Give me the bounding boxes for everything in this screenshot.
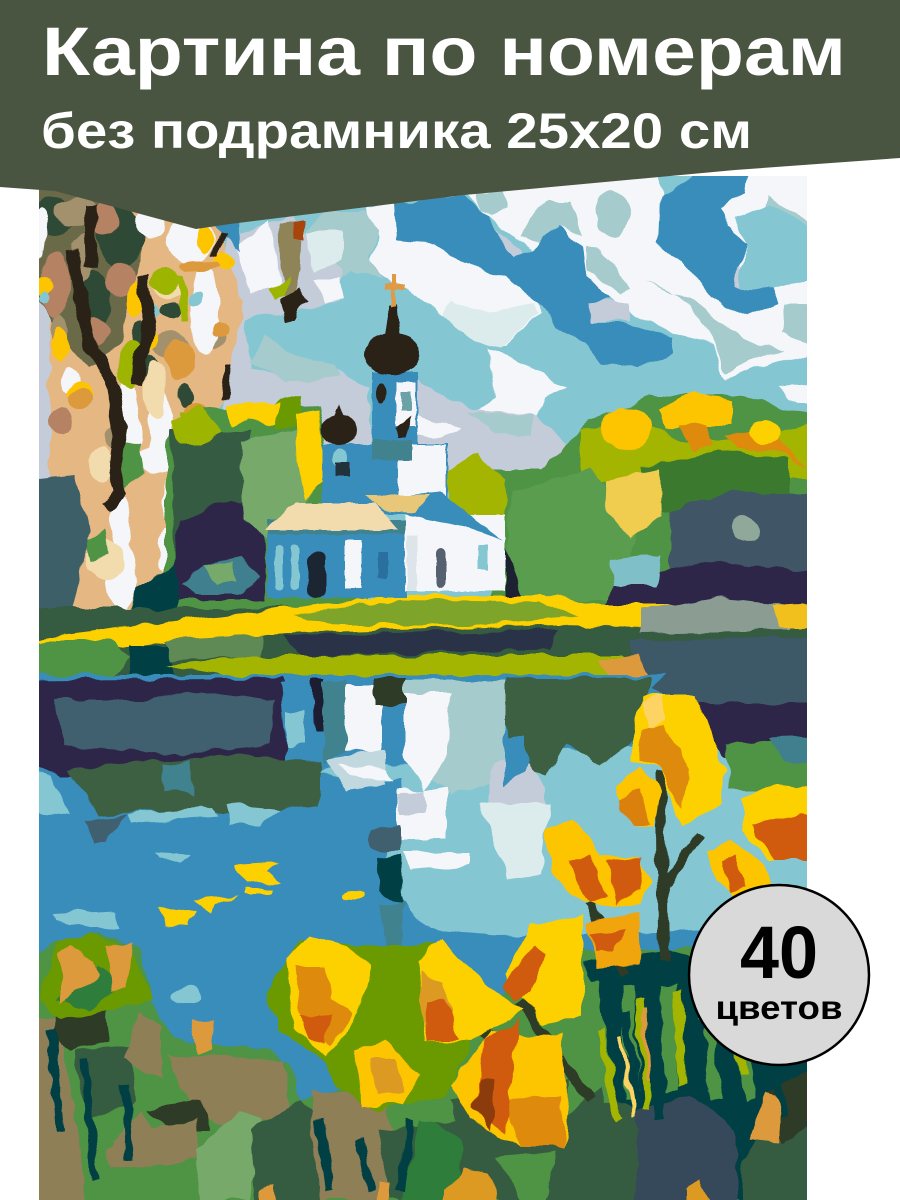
header banner (0, 0, 900, 229)
church (264, 274, 505, 598)
title: Картина по номерам (42, 13, 846, 90)
badge: 40 colours (689, 885, 869, 1065)
yellow flowers (260, 695, 830, 1200)
background trees (39, 391, 807, 612)
sky and clouds (215, 176, 807, 600)
shore and far bank (39, 593, 807, 678)
birch tree foliage (39, 190, 308, 610)
badge: 40 colours: 40 (740, 911, 818, 994)
lake with reflections (39, 672, 807, 1100)
painting: church by the lake (39, 176, 807, 1200)
foreground grass and ground (20, 935, 830, 1200)
badge: 40 colours: цветов (716, 989, 842, 1026)
subtitle: без подрамника 25х20 см (41, 103, 752, 159)
